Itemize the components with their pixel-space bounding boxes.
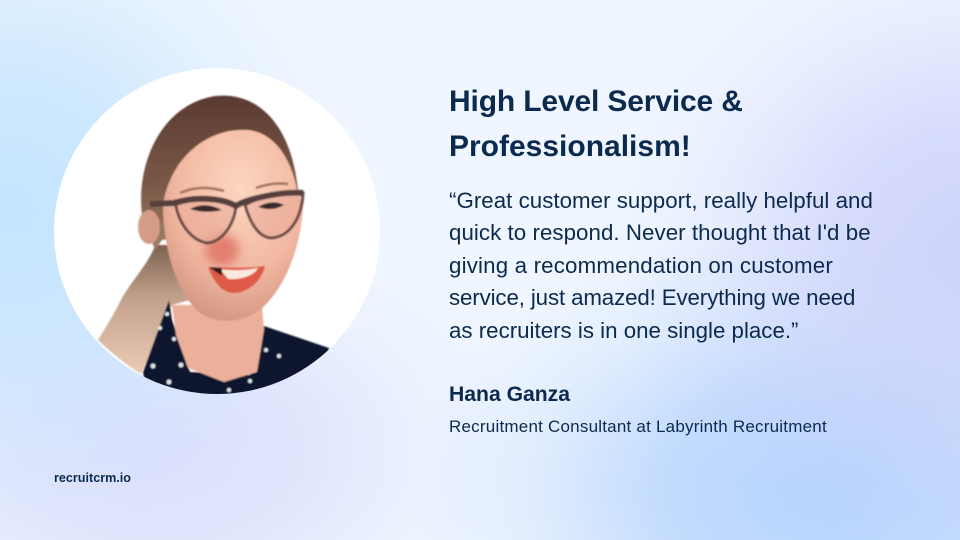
- quote text: service, just amazed! Everything we need: [449, 285, 855, 310]
- quote text: giving a recommendation on customer: [449, 253, 833, 278]
- heading: [449, 85, 743, 163]
- quote text: [449, 188, 873, 343]
- author name: Hana Ganza: [449, 383, 570, 406]
- eyebrows: [180, 184, 288, 193]
- quote text: “Great customer support, really helpful and: [449, 188, 873, 213]
- ear: [138, 210, 160, 244]
- hair: [141, 96, 298, 250]
- white photo circle: [54, 68, 380, 394]
- teeth: [220, 268, 258, 279]
- website label: recruitcrm.io: [54, 471, 131, 485]
- heading: Professionalism!: [449, 130, 691, 163]
- author role: Recruitment Consultant at Labyrinth Recruitment: [449, 417, 827, 436]
- ponytail: [98, 245, 190, 374]
- heading: High Level Service &: [449, 85, 743, 118]
- eyes: [190, 202, 284, 212]
- quote text: quick to respond. Never thought that I'd be: [449, 220, 871, 245]
- quote text: as recruiters is in one single place.”: [449, 318, 798, 343]
- dress dots: [151, 312, 281, 392]
- glasses top frame: [150, 193, 303, 206]
- nose shadow and cheek colour: [205, 234, 239, 266]
- face: [163, 130, 303, 321]
- dress: [143, 300, 329, 400]
- glasses: [175, 193, 303, 243]
- portrait photo: [54, 68, 380, 394]
- lips: [208, 266, 265, 293]
- neck: [172, 305, 264, 382]
